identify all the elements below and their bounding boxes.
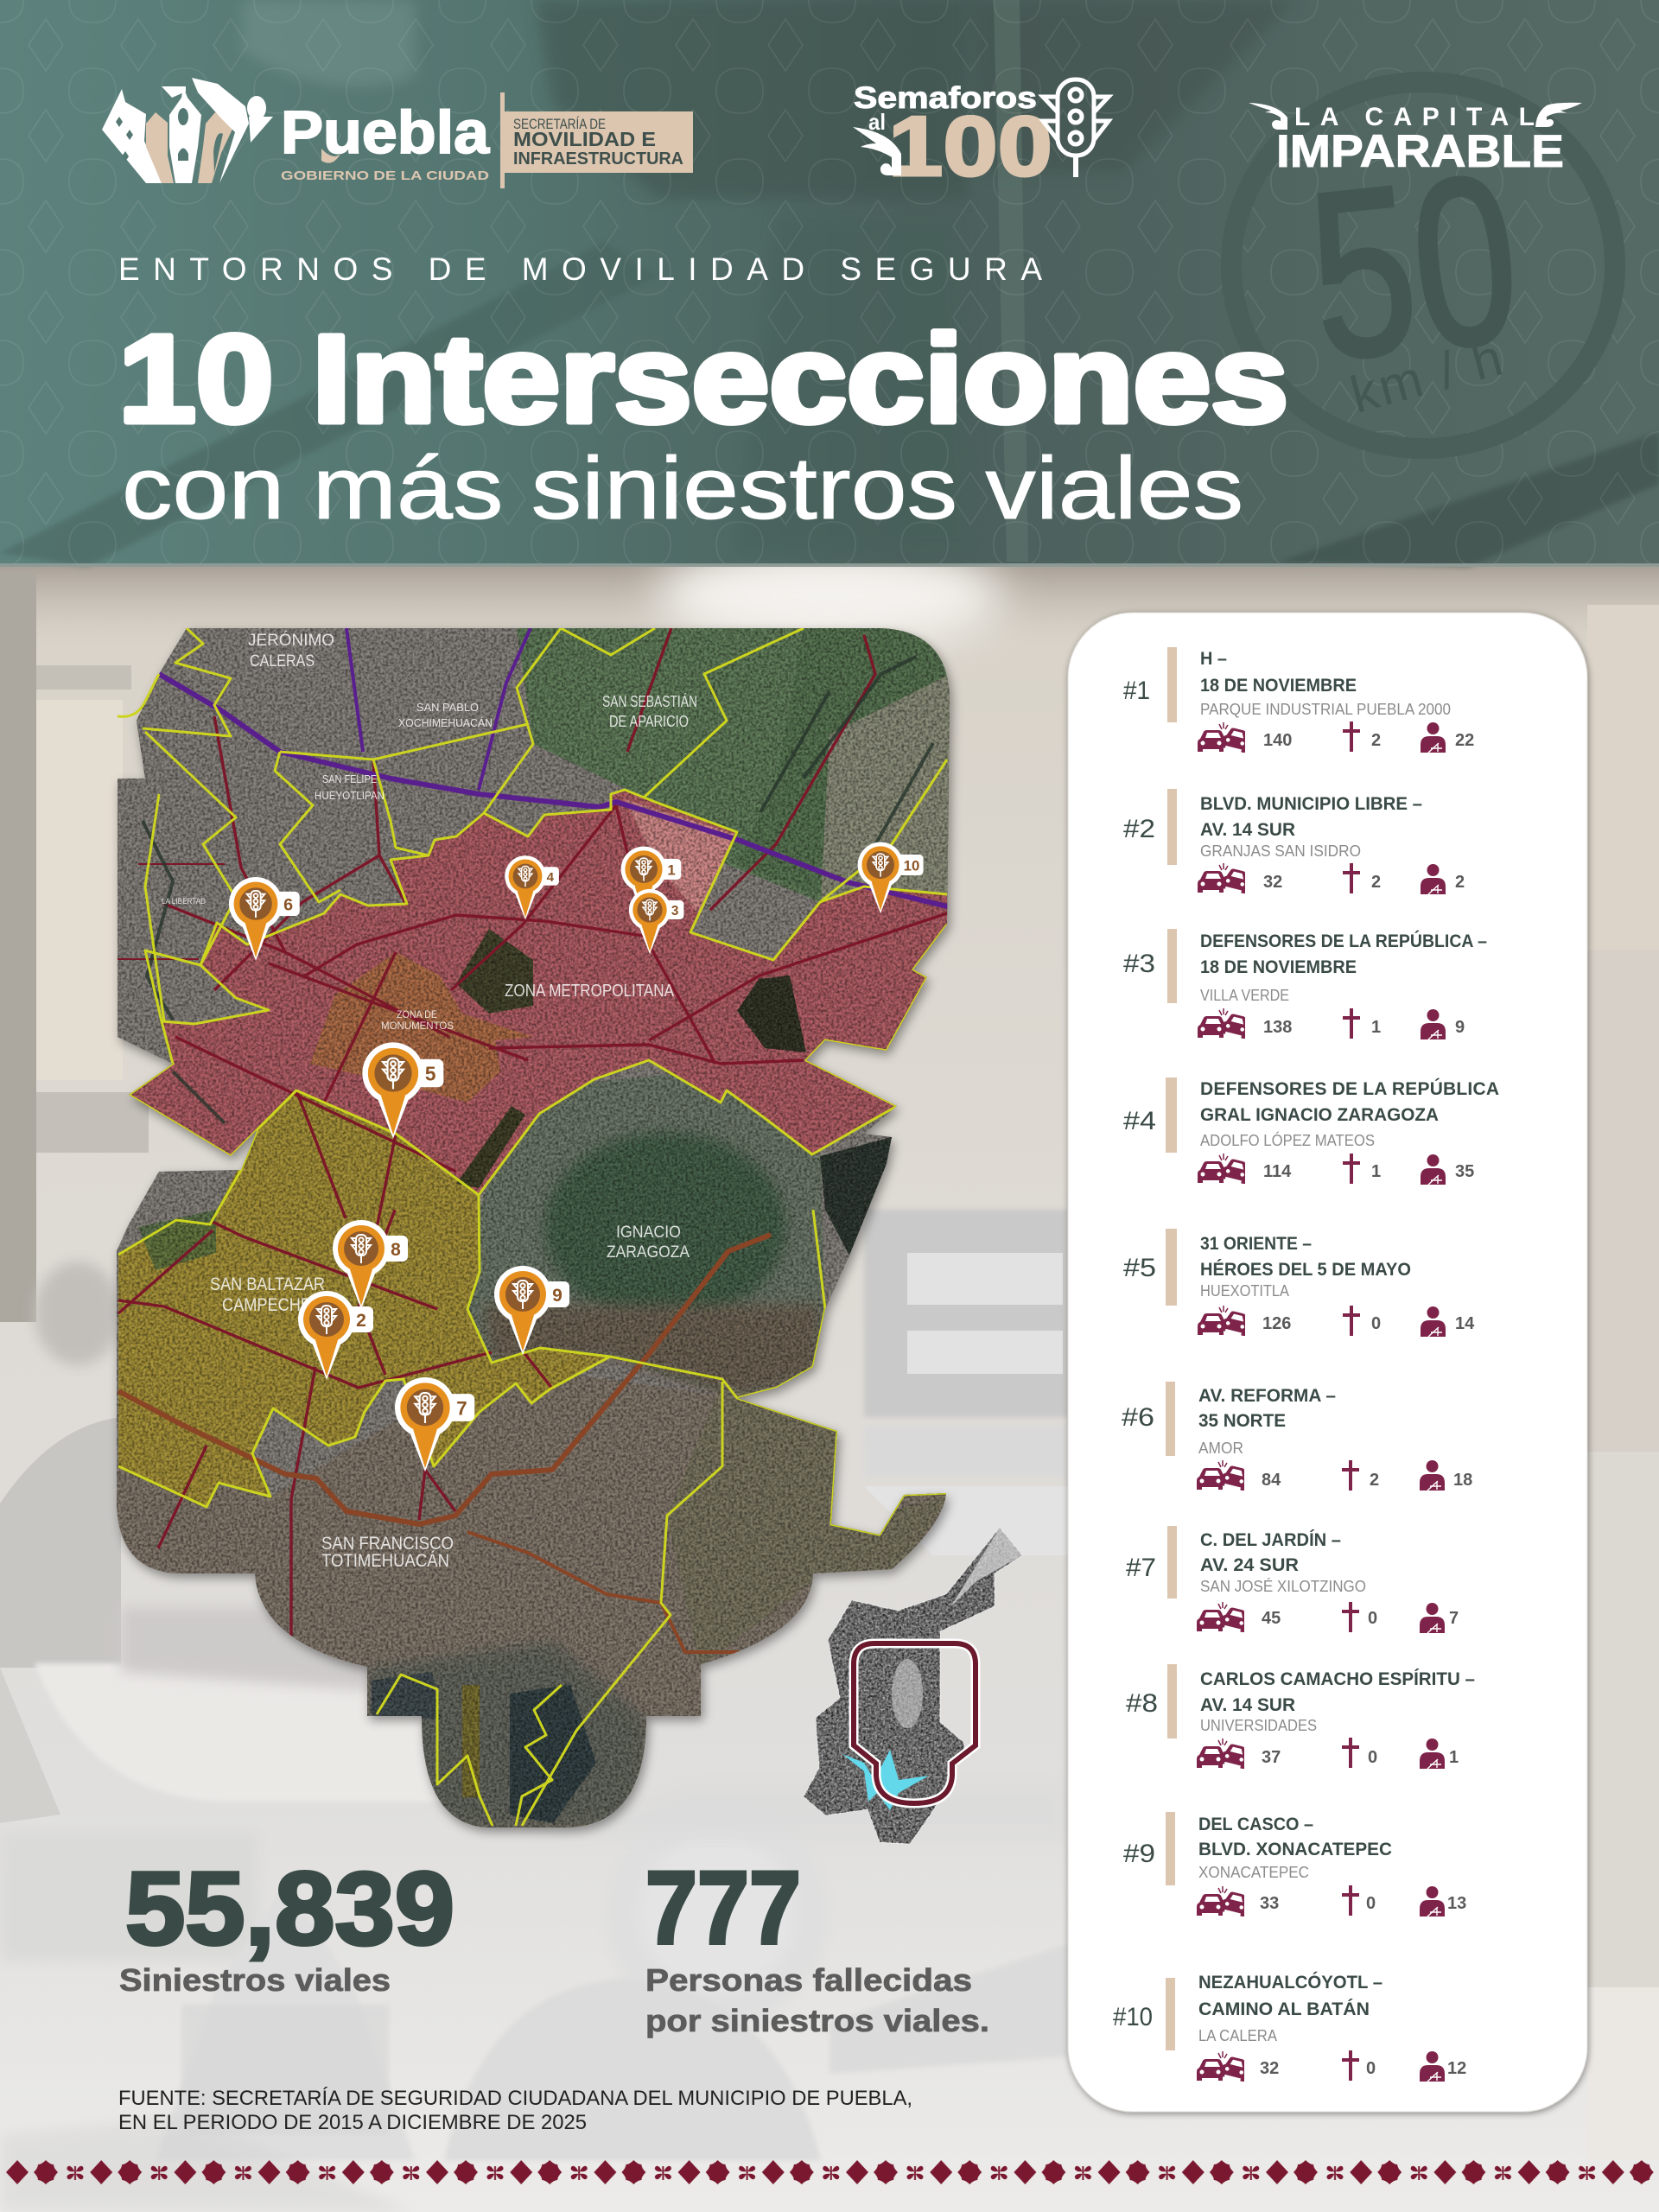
- lower background photo: [0, 544, 1659, 2212]
- map place labels: [162, 631, 697, 1571]
- logo: Semáforos al 100: 100: [888, 99, 1052, 194]
- logo: Puebla Gobierno de la Ciudad: [102, 78, 693, 188]
- stat: personas fallecidas: [645, 1850, 989, 2038]
- row 8: [1126, 1664, 1475, 1770]
- stat: personas fallecidas: por siniestros viales.: [645, 2003, 989, 2038]
- row 9: #9: [1123, 1840, 1155, 1868]
- locator mini map: [799, 1525, 1024, 1849]
- row 7: 45: [1262, 1609, 1281, 1628]
- row 8: UNIVERSIDADES: [1200, 1717, 1317, 1734]
- map place labels: ZARAGOZA: [607, 1243, 690, 1262]
- row 8: CARLOS CAMACHO ESPÍRITU –: [1200, 1669, 1475, 1689]
- row 4: DEFENSORES DE LA REPÚBLICA: [1200, 1078, 1499, 1099]
- row 4: ADOLFO LÓPEZ MATEOS: [1200, 1131, 1375, 1149]
- row 6: [1122, 1382, 1472, 1491]
- row 1: 18 DE NOVIEMBRE: [1200, 676, 1357, 696]
- row 7: AV. 24 SUR: [1200, 1555, 1299, 1575]
- row 9: 33: [1260, 1894, 1279, 1913]
- row 10: 32: [1260, 2059, 1279, 2078]
- map place labels: MONUMENTOS: [381, 1020, 454, 1032]
- row 8: 37: [1262, 1748, 1281, 1767]
- panel: intersection ranking: [1068, 613, 1587, 2112]
- row 8: 1: [1449, 1748, 1459, 1767]
- row 2: 32: [1263, 873, 1282, 892]
- source note: [118, 2087, 912, 2134]
- row 5: 0: [1371, 1314, 1381, 1333]
- map place labels: SAN FRANCISCO: [321, 1534, 454, 1554]
- map place labels: LA LIBERTAD: [162, 897, 206, 906]
- row 4: 114: [1263, 1162, 1292, 1181]
- marker 3: 3: [671, 904, 678, 918]
- row 3: 9: [1455, 1018, 1465, 1037]
- row 10: #10: [1113, 2003, 1153, 2031]
- map place labels: SAN SEBASTIÁN: [602, 693, 697, 710]
- row 7: C. DEL JARDÍN –: [1200, 1530, 1341, 1550]
- row 8: 0: [1368, 1748, 1377, 1767]
- title: 10 Intersecciones: 10 Intersecciones: [118, 309, 1288, 448]
- marker 1: 1: [667, 861, 676, 878]
- row 1: 2: [1371, 731, 1381, 750]
- red zone: [129, 790, 947, 1195]
- logo: La Capital Imparable: IMPARABLE: [1276, 126, 1564, 177]
- row 3: DEFENSORES DE LA REPÚBLICA –: [1200, 931, 1487, 951]
- map place labels: HUEYOTLIPAN: [315, 789, 385, 802]
- map place labels: JERÓNIMO: [248, 631, 334, 650]
- icon: traffic light: [1043, 79, 1109, 177]
- row 4: 35: [1455, 1162, 1474, 1181]
- marker 5: 5: [425, 1063, 436, 1085]
- row 6: AV. REFORMA –: [1198, 1386, 1336, 1406]
- row 6: #6: [1122, 1403, 1154, 1432]
- marker 9: [494, 1266, 569, 1355]
- logo: Puebla Gobierno de la Ciudad: MOVILIDAD E: [513, 128, 656, 150]
- icon: Puebla crest: [102, 78, 273, 183]
- map place labels: XOCHIMEHUACÁN: [398, 716, 493, 729]
- map place labels: SAN BALTAZAR: [210, 1274, 325, 1294]
- logo: Semáforos al 100: Semaforos: [854, 81, 1037, 115]
- row 2: #2: [1123, 815, 1155, 843]
- row 10: 12: [1447, 2059, 1466, 2078]
- marker 10: 10: [904, 857, 919, 874]
- marker 8: [333, 1220, 408, 1309]
- row 9: [1123, 1812, 1466, 1917]
- map place labels: ZONA DE: [397, 1008, 437, 1020]
- row 7: [1126, 1526, 1459, 1633]
- kicker: Entornos de movilidad segura: ENTORNOS DE MOVILIDAD SEGURA: [118, 251, 1042, 287]
- row 4: #4: [1123, 1107, 1156, 1135]
- logo: Puebla Gobierno de la Ciudad: INFRAESTRUCTURA: [513, 149, 683, 168]
- marker 8: 8: [391, 1240, 401, 1260]
- map of Puebla zones: [112, 622, 959, 1832]
- zone boundaries: [118, 628, 947, 1826]
- logo: Semáforos al 100: al: [868, 109, 886, 135]
- stat: siniestros viales: Siniestros viales: [119, 1962, 391, 1998]
- row 10: [1113, 1972, 1466, 2082]
- logo: Puebla Gobierno de la Ciudad: SECRETARÍA DE: [513, 116, 606, 132]
- arterial roads: [118, 628, 947, 1636]
- logo: La Capital Imparable: [1249, 103, 1582, 177]
- marker 1: [621, 847, 681, 918]
- satellite texture: [112, 622, 959, 1832]
- row 4: [1123, 1077, 1499, 1185]
- marker 7: [395, 1377, 474, 1471]
- row 9: 0: [1366, 1894, 1376, 1913]
- stat: siniestros viales: 55,839: [125, 1851, 454, 1967]
- marker 10: [858, 842, 924, 913]
- row 8: AV. 14 SUR: [1200, 1695, 1295, 1715]
- stat: personas fallecidas: Personas fallecidas: [645, 1962, 972, 1998]
- row 1: #1: [1123, 677, 1150, 705]
- row 3: 138: [1263, 1018, 1292, 1037]
- row 10: LA CALERA: [1198, 2027, 1277, 2044]
- map place labels: CALERAS: [250, 652, 315, 671]
- row 7: #7: [1126, 1554, 1156, 1582]
- speed sign: 50: [1299, 124, 1529, 410]
- subtitle: con más siniestros viales: con más siniestros viales: [122, 439, 1243, 537]
- row 5: 126: [1262, 1314, 1291, 1333]
- row 2: 2: [1455, 873, 1465, 892]
- row 7: 0: [1368, 1609, 1377, 1628]
- row 4: GRAL IGNACIO ZARAGOZA: [1200, 1105, 1439, 1125]
- row 7: SAN JOSÉ XILOTZINGO: [1200, 1578, 1366, 1595]
- row 3: VILLA VERDE: [1200, 987, 1289, 1004]
- row 6: 35 NORTE: [1198, 1411, 1286, 1431]
- row 5: [1123, 1229, 1475, 1337]
- map place labels: CAMPECHE: [222, 1295, 311, 1315]
- row 9: DEL CASCO –: [1198, 1815, 1313, 1834]
- row 9: XONACATEPEC: [1198, 1864, 1309, 1881]
- map place labels: SAN FELIPE: [322, 772, 377, 785]
- row 1: 140: [1263, 731, 1292, 750]
- marker 9: 9: [552, 1286, 563, 1306]
- map place labels: SAN PABLO: [416, 701, 479, 714]
- row 3: 18 DE NOVIEMBRE: [1200, 957, 1357, 977]
- row 8: #8: [1126, 1689, 1158, 1718]
- marker 7: 7: [456, 1397, 467, 1419]
- source note: EN EL PERIODO DE 2015 A DICIEMBRE DE 2025: [118, 2111, 587, 2134]
- row 3: #3: [1123, 950, 1155, 978]
- row 1: H –: [1200, 649, 1227, 669]
- logo: Puebla Gobierno de la Ciudad: GOBIERNO DE LA CIUDAD: [281, 168, 489, 183]
- purple highway: [159, 628, 950, 907]
- row 3: 1: [1371, 1018, 1381, 1037]
- row 1: 22: [1455, 731, 1474, 750]
- row 10: NEZAHUALCÓYOTL –: [1198, 1972, 1382, 1993]
- row 2: [1123, 789, 1465, 894]
- row 6: 18: [1453, 1471, 1472, 1490]
- row 6: 84: [1262, 1471, 1281, 1490]
- map place labels: IGNACIO: [616, 1224, 681, 1242]
- row 2: 2: [1371, 873, 1381, 892]
- zona de monumentos: [310, 952, 533, 1103]
- row 10: CAMINO AL BATÁN: [1198, 1999, 1370, 2019]
- yellow zone: [118, 1090, 610, 1507]
- marker 4: 4: [547, 870, 555, 885]
- row 9: BLVD. XONACATEPEC: [1198, 1840, 1392, 1859]
- row 2: BLVD. MUNICIPIO LIBRE –: [1200, 794, 1422, 814]
- row 6: 2: [1370, 1471, 1379, 1490]
- source note: FUENTE: SECRETARÍA DE SEGURIDAD CIUDADANA DEL MUNICIPIO DE PUEBLA,: [118, 2087, 912, 2110]
- marker 3: [629, 889, 683, 954]
- row 5: #5: [1123, 1254, 1156, 1282]
- map place labels: DE APARICIO: [609, 713, 689, 730]
- marker 2: 2: [356, 1311, 366, 1331]
- stat: personas fallecidas: 777: [645, 1850, 801, 1966]
- row 1: [1123, 647, 1474, 753]
- row 3: [1123, 929, 1487, 1039]
- row 6: AMOR: [1198, 1440, 1243, 1457]
- marker 6: 6: [283, 896, 293, 915]
- row 1: PARQUE INDUSTRIAL PUEBLA 2000: [1200, 701, 1451, 718]
- row 5: 14: [1455, 1314, 1475, 1333]
- speed sign: [1231, 82, 1615, 448]
- logo: La Capital Imparable: LA CAPITAL: [1294, 103, 1535, 131]
- row 10: 0: [1366, 2059, 1376, 2078]
- header band photo: [0, 0, 1659, 567]
- row 5: HÉROES DEL 5 DE MAYO: [1200, 1260, 1411, 1280]
- map place labels: ZONA METROPOLITANA: [505, 982, 675, 1001]
- row 4: 1: [1371, 1162, 1381, 1181]
- logo: Semáforos al 100: [853, 79, 1109, 194]
- row 2: GRANJAS SAN ISIDRO: [1200, 842, 1361, 860]
- marker 5: [362, 1042, 443, 1139]
- monitor panel: [864, 1210, 1068, 1417]
- speed sign: km / h: [1344, 328, 1508, 424]
- marker 4: [505, 855, 559, 919]
- wordmark: Puebla: [281, 99, 490, 166]
- base land cover: [112, 622, 959, 1832]
- ornamental border: [0, 2160, 1659, 2186]
- row 5: 31 ORIENTE –: [1200, 1234, 1312, 1254]
- map place labels: TOTIMEHUACÁN: [321, 1551, 449, 1571]
- marker 2: [298, 1291, 373, 1380]
- row 5: HUEXOTITLA: [1200, 1282, 1289, 1300]
- dark parks: [737, 976, 806, 1052]
- row 7: 7: [1449, 1609, 1459, 1628]
- row 9: 13: [1447, 1894, 1466, 1913]
- rivers: [143, 657, 933, 1123]
- row 2: AV. 14 SUR: [1200, 820, 1295, 840]
- marker 6: [229, 877, 300, 961]
